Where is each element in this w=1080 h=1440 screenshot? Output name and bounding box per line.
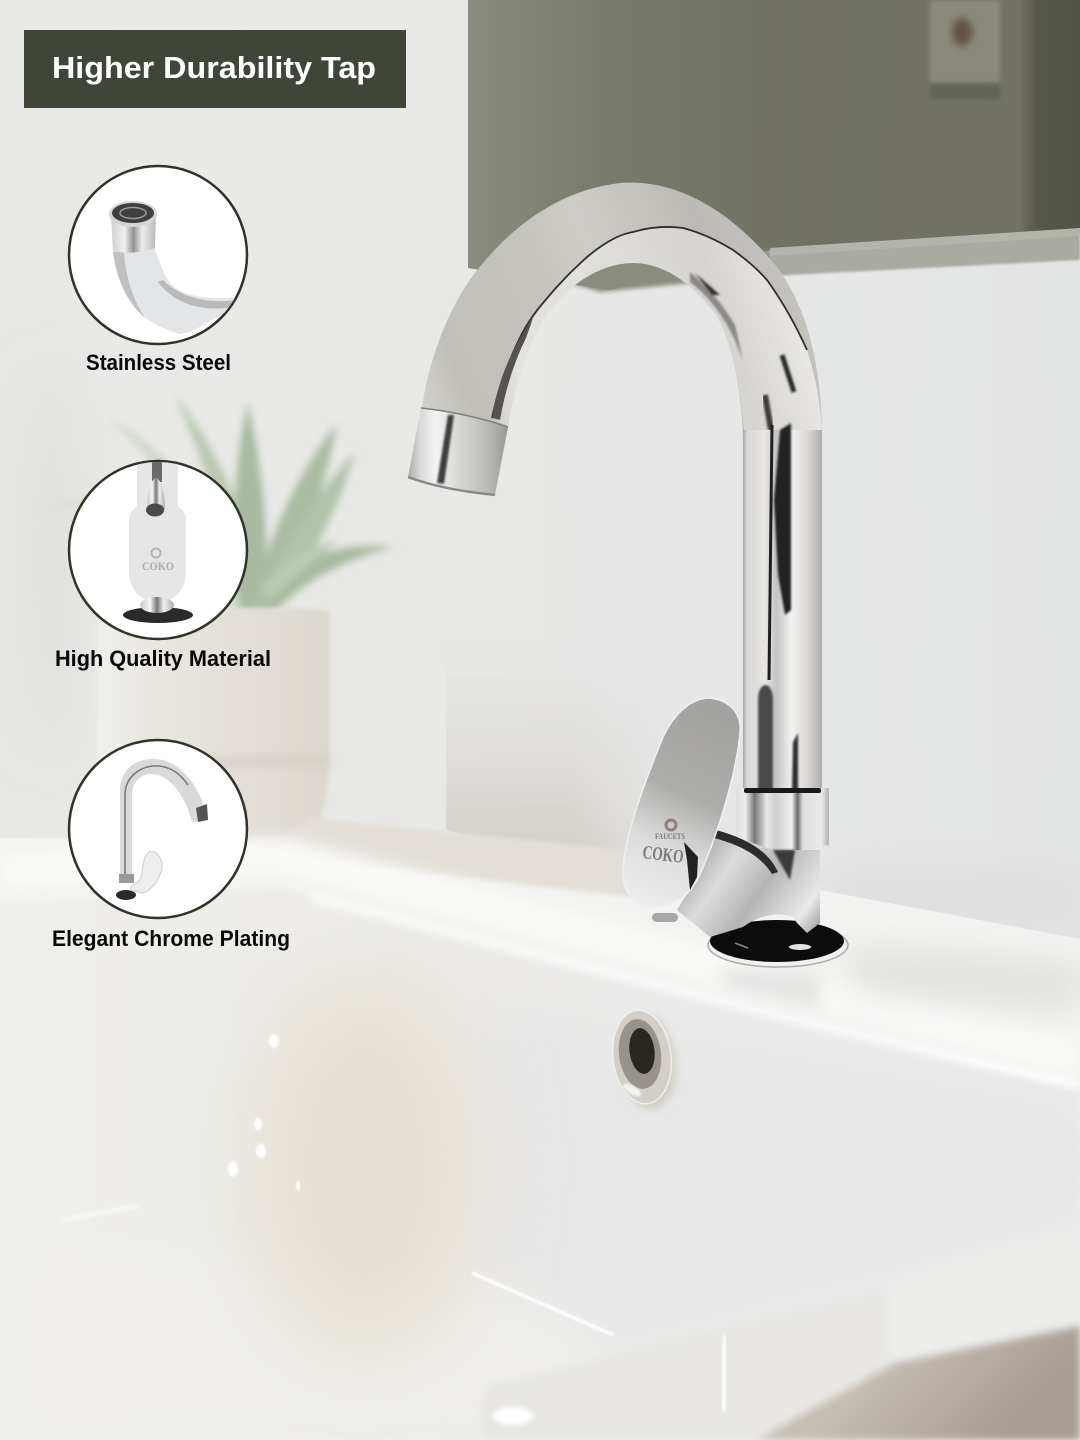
icon: whole faucet xyxy=(69,740,247,918)
faucet body xyxy=(652,830,820,937)
faucet aerator tip xyxy=(408,408,508,495)
faucet arched spout xyxy=(422,183,822,792)
white sink basin xyxy=(0,818,1080,1440)
handle brand logo: COKO xyxy=(641,842,685,868)
feature: stainless steel xyxy=(69,166,247,375)
overflow drain ring xyxy=(607,1007,682,1113)
main faucet xyxy=(408,183,848,967)
icon: faucet front view: COKO xyxy=(142,559,174,573)
spout black reflection line xyxy=(492,227,807,418)
icon: faucet front view xyxy=(69,460,247,639)
faucet lever handle xyxy=(623,698,740,908)
wall mirror xyxy=(468,0,1080,292)
pipe collar xyxy=(736,788,829,851)
faucet base plate xyxy=(708,920,848,967)
wall shadow and light xyxy=(10,370,1080,930)
label: elegant chrome plating: Elegant Chrome Plating xyxy=(52,926,290,951)
reflected picture frame xyxy=(930,0,1000,99)
icon: aerator close-up xyxy=(69,166,247,344)
title banner: Higher Durability Tap xyxy=(52,50,376,85)
title banner xyxy=(24,30,406,108)
plant pot xyxy=(97,608,330,840)
background: bathroom wall xyxy=(0,0,1080,1000)
feature: high quality material xyxy=(55,460,271,671)
label: high quality material: High Quality Material xyxy=(55,646,271,671)
label: stainless steel: Stainless Steel xyxy=(86,350,231,375)
basin front rim xyxy=(482,1290,890,1440)
feature: elegant chrome plating xyxy=(52,740,290,951)
mirror ledge xyxy=(770,230,1080,276)
blurred plant xyxy=(31,394,395,620)
handle brand logo: FAUCETS xyxy=(655,832,685,841)
handle brand logo xyxy=(641,820,685,868)
